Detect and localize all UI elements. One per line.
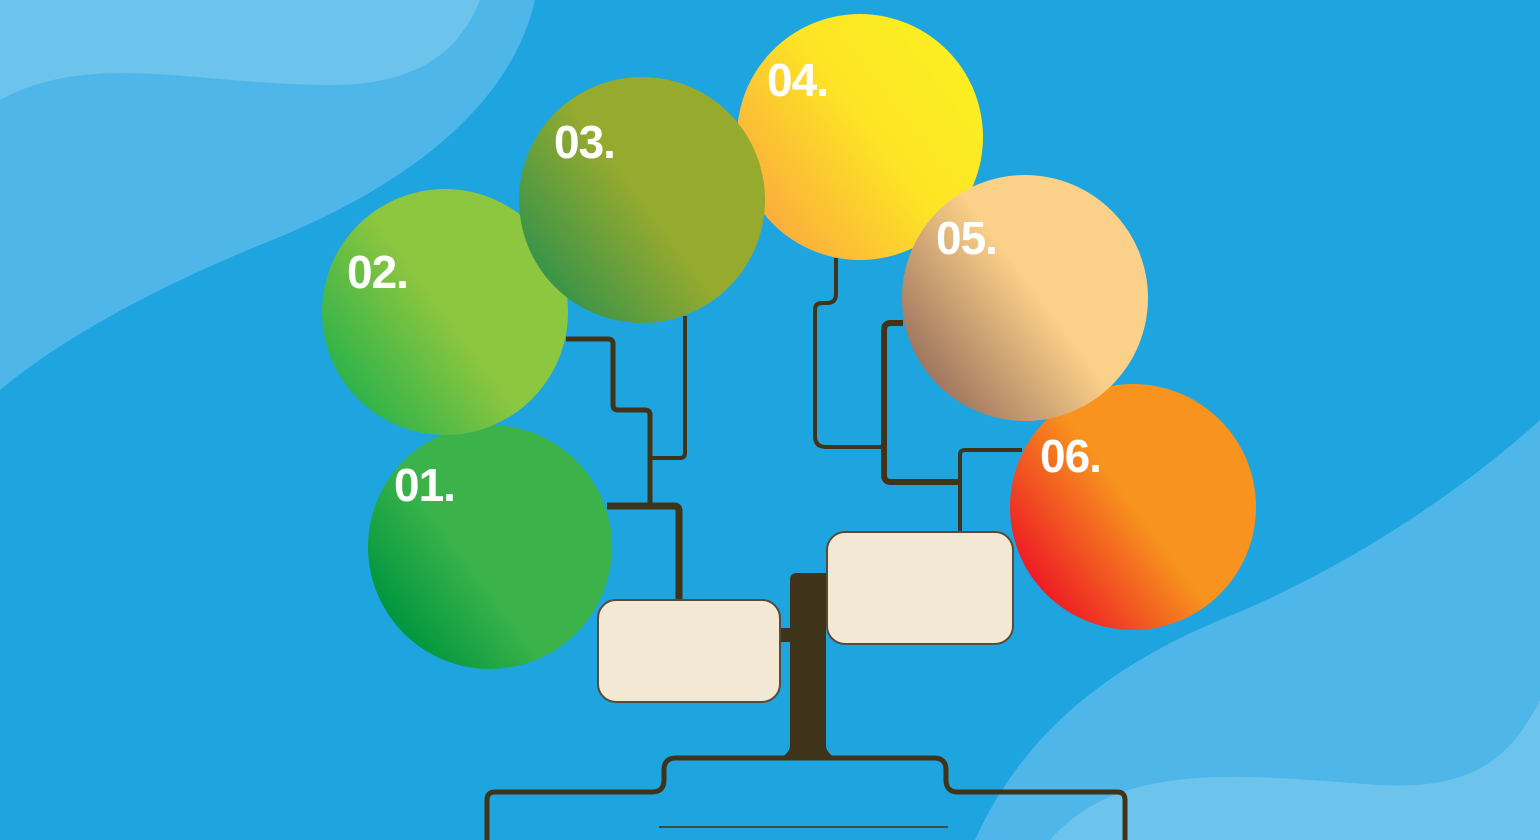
- circle 01: 01.: [394, 459, 455, 511]
- circle 05: 05.: [936, 212, 997, 264]
- circle 03: [519, 77, 765, 323]
- text box left: [598, 600, 780, 702]
- circle 06: 06.: [1040, 430, 1101, 482]
- tree base lines: [487, 758, 1125, 840]
- branches right: [815, 258, 1022, 532]
- circle 04: [737, 14, 983, 260]
- background blob: bottom-right: [975, 420, 1540, 840]
- trunk: [778, 573, 834, 757]
- circle 01: [368, 425, 612, 669]
- background blob: top-left: [0, 0, 535, 390]
- circle 06: [1010, 384, 1256, 630]
- circle 04: 04.: [767, 54, 828, 106]
- text box right: [827, 532, 1013, 644]
- circle 05: [902, 175, 1148, 421]
- branches left: [566, 316, 685, 600]
- circle 03: 03.: [554, 116, 615, 168]
- circle 02: [322, 189, 568, 435]
- circle 02: 02.: [347, 246, 408, 298]
